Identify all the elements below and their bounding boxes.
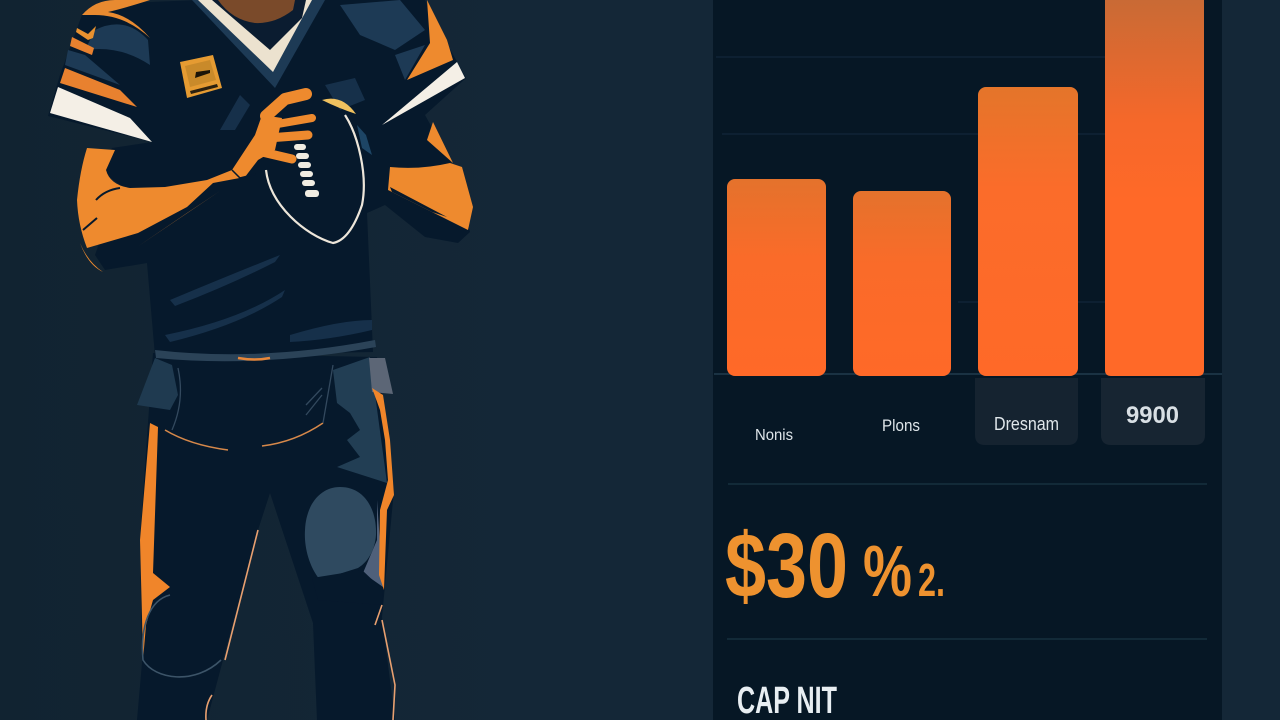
belt (155, 340, 376, 361)
bar 2 (853, 191, 951, 376)
collar inner (212, 0, 306, 50)
divider (727, 484, 1207, 639)
football (266, 97, 372, 243)
bar 1 (727, 179, 826, 376)
bar 3 (978, 87, 1078, 376)
inner leg line (206, 530, 258, 720)
left shoulder shading (65, 24, 150, 85)
right calf line (375, 605, 395, 720)
chart gridlines (716, 57, 1105, 302)
label 1: Nonis (755, 427, 793, 444)
label chip 3 (975, 378, 1078, 445)
label chip 4 (1101, 378, 1205, 445)
right sleeve orange (407, 0, 453, 80)
left sleeve white band (50, 87, 152, 142)
left sleeve chevron (76, 26, 96, 40)
waist trim left (165, 430, 228, 450)
ball laces (294, 144, 319, 197)
chest patch (180, 55, 222, 98)
waist trim right (262, 423, 323, 446)
big stat: $30 (725, 515, 848, 617)
left sleeve orange stripe (60, 68, 137, 107)
illustration: football player (48, 0, 473, 720)
panel: bar chart and stats (713, 0, 1222, 720)
jersey (48, 0, 470, 361)
left leg orange stripe (140, 423, 170, 660)
left hip flap (137, 358, 178, 410)
glove details (357, 125, 372, 155)
neck skin (218, 0, 295, 23)
collar white (198, 0, 312, 72)
label 3: Dresnam (994, 414, 1059, 434)
top shoulder orange strip (82, 0, 150, 38)
bar chart (727, 0, 1204, 376)
panel background (713, 0, 1222, 720)
left sleeve small stripe (70, 37, 94, 55)
fingers (262, 94, 312, 159)
grey thigh shade (363, 500, 383, 587)
big stat: % (863, 532, 912, 612)
right hip flap (369, 358, 393, 394)
knee pad (305, 487, 376, 580)
chest shading (165, 78, 372, 342)
collar trim (192, 0, 325, 88)
right hip shade (333, 357, 387, 483)
ball tip highlight (322, 99, 356, 114)
knee band (312, 570, 383, 605)
right arm (388, 122, 473, 230)
belt orange accent (238, 358, 270, 360)
left knee outline (142, 595, 221, 677)
label 4: 9900 (1126, 402, 1179, 429)
label 2: Plons (882, 416, 920, 435)
right shoulder shading (340, 0, 425, 80)
pocket lines (172, 365, 333, 430)
bar 4 (1105, 0, 1204, 376)
pants (137, 353, 395, 720)
big stat: 2. (918, 554, 945, 606)
big stat (725, 515, 945, 617)
left arm and hand (77, 94, 312, 272)
right sleeve white band (382, 62, 465, 125)
right leg orange stripe (372, 388, 394, 590)
